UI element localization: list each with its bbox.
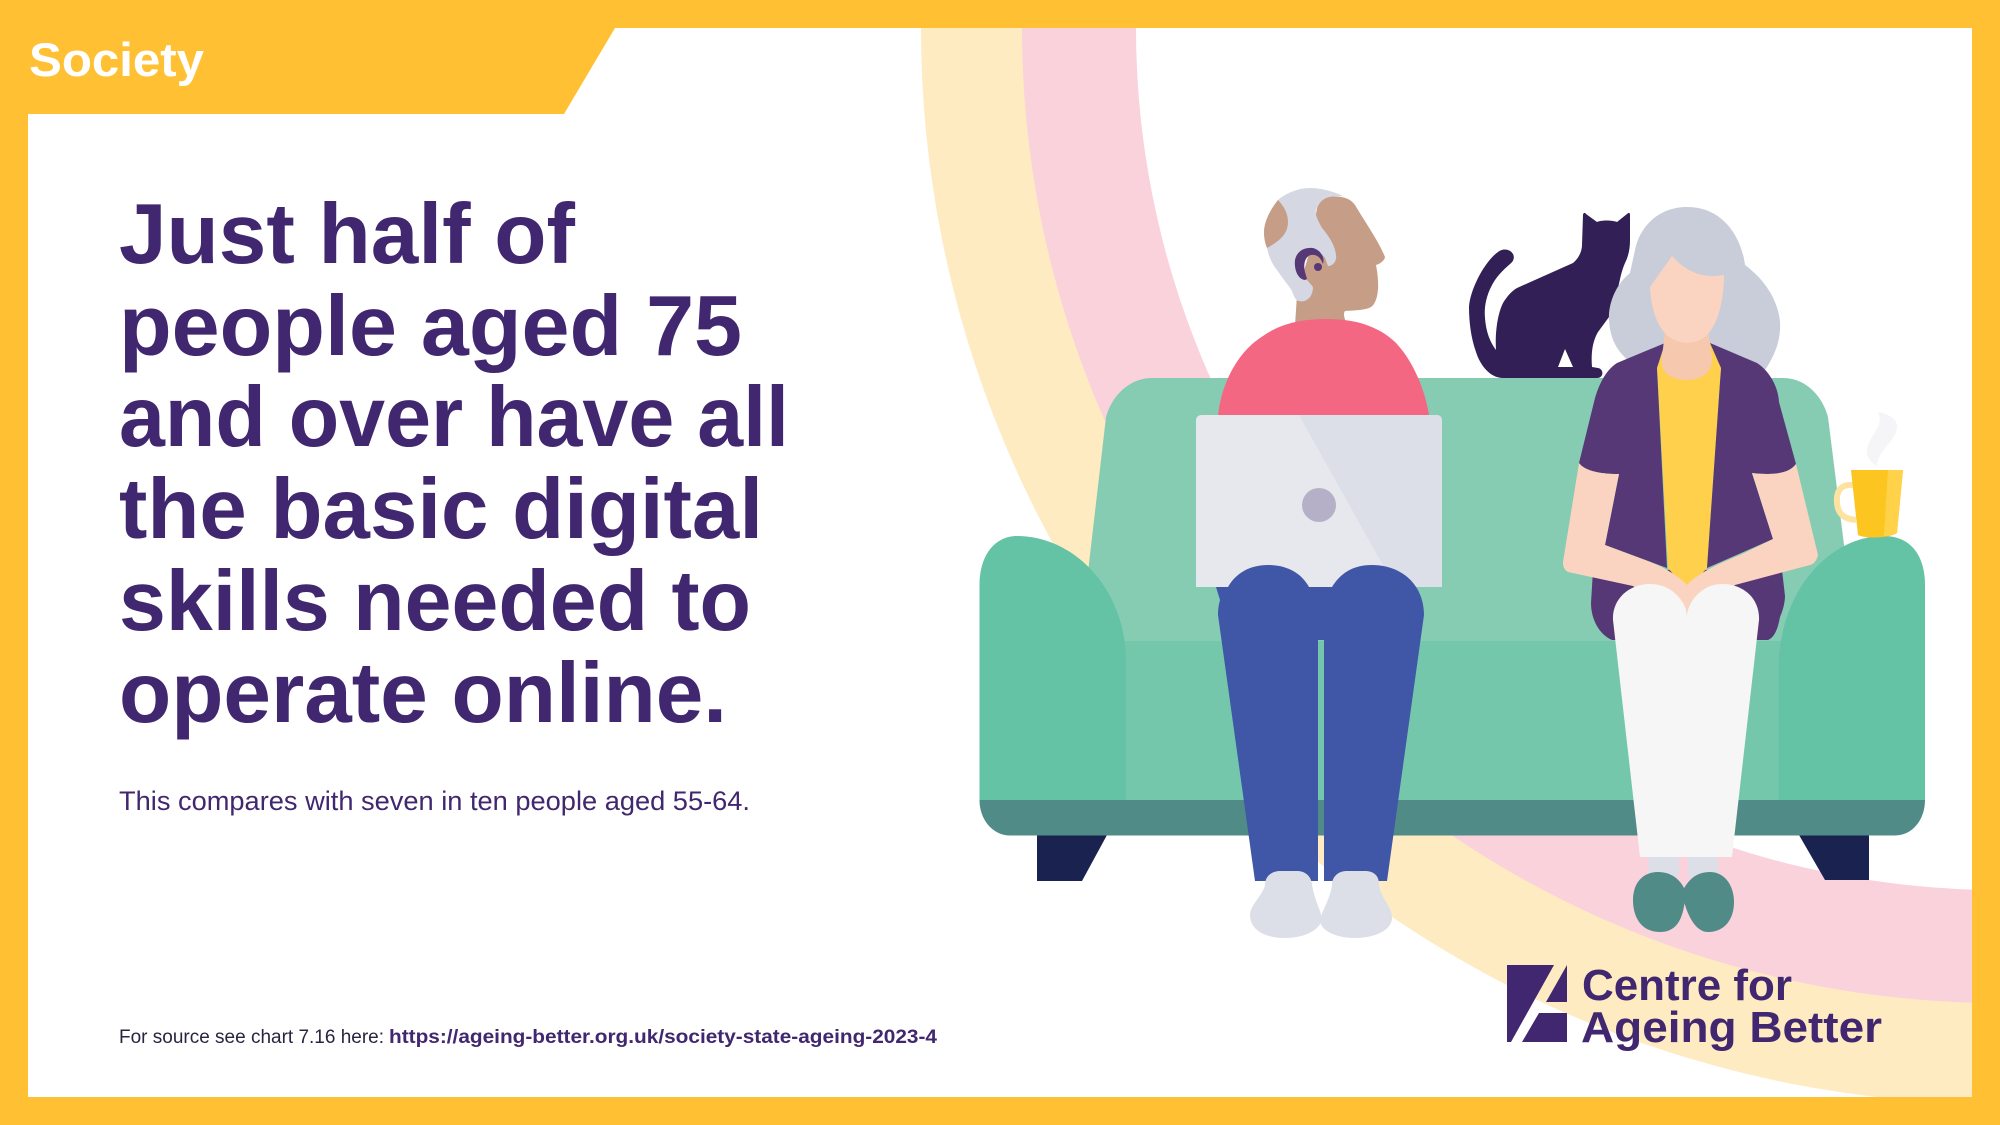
left armrest bbox=[980, 536, 1126, 800]
woman lower cardigan bbox=[1591, 570, 1785, 640]
woman socks bbox=[1649, 857, 1718, 877]
sofa seat bbox=[1080, 641, 1850, 801]
man hair bbox=[1264, 188, 1343, 301]
headline bbox=[119, 187, 789, 741]
sofa base bbox=[980, 800, 1925, 836]
man neck and face bbox=[1295, 196, 1385, 325]
headline: and over have all bbox=[119, 370, 789, 465]
cat bbox=[1469, 213, 1630, 378]
logo wordmark: Ageing Better bbox=[1581, 1003, 1882, 1052]
woman neck bbox=[1662, 330, 1712, 380]
woman trousers bbox=[1613, 584, 1759, 857]
man shirt bbox=[1218, 319, 1429, 415]
headline: the basic digital bbox=[119, 462, 763, 557]
hearing aid ear bbox=[1295, 248, 1324, 280]
sofa legs bbox=[1037, 835, 1869, 881]
headline: Just half of bbox=[119, 187, 576, 282]
coffee mug bbox=[1837, 412, 1903, 537]
cardigan bbox=[1579, 343, 1796, 568]
man trousers bbox=[1216, 565, 1424, 881]
tab label: Society bbox=[29, 33, 204, 86]
right armrest bbox=[1778, 536, 1925, 800]
steam bbox=[1867, 412, 1897, 466]
logo wordmark: Centre for bbox=[1582, 961, 1792, 1010]
woman hair bbox=[1609, 207, 1780, 370]
source note bbox=[119, 1027, 937, 1048]
man bbox=[1196, 188, 1442, 938]
logo wordmark bbox=[1581, 961, 1882, 1052]
supporting text: This compares with seven in ten people aged 55-64. bbox=[119, 786, 750, 816]
laptop shade bbox=[1299, 415, 1442, 587]
woman top bbox=[1657, 343, 1721, 590]
headline: skills needed to bbox=[119, 554, 751, 649]
source note: https://ageing-better.org.uk/society-state-ageing-2023-4 bbox=[389, 1027, 937, 1048]
section tab bbox=[28, 28, 615, 114]
sofa bbox=[980, 378, 1925, 881]
logo mark bbox=[1507, 965, 1567, 1042]
sofa back bbox=[1080, 378, 1856, 641]
mug handle bbox=[1837, 485, 1856, 520]
source note: For source see chart 7.16 here: bbox=[119, 1027, 384, 1048]
mug highlight bbox=[1884, 470, 1903, 536]
logo bbox=[1507, 961, 1882, 1052]
background arcs bbox=[921, 0, 2000, 1104]
mug body bbox=[1851, 470, 1903, 537]
man shoes bbox=[1250, 871, 1392, 938]
laptop logo bbox=[1302, 488, 1336, 522]
woman slippers bbox=[1633, 872, 1734, 932]
man bald patch bbox=[1264, 200, 1288, 248]
headline: operate online. bbox=[119, 646, 727, 741]
headline: people aged 75 bbox=[119, 279, 742, 374]
woman arms bbox=[1563, 463, 1818, 622]
woman face bbox=[1650, 256, 1724, 343]
laptop bbox=[1196, 415, 1442, 587]
woman bbox=[1563, 207, 1818, 932]
